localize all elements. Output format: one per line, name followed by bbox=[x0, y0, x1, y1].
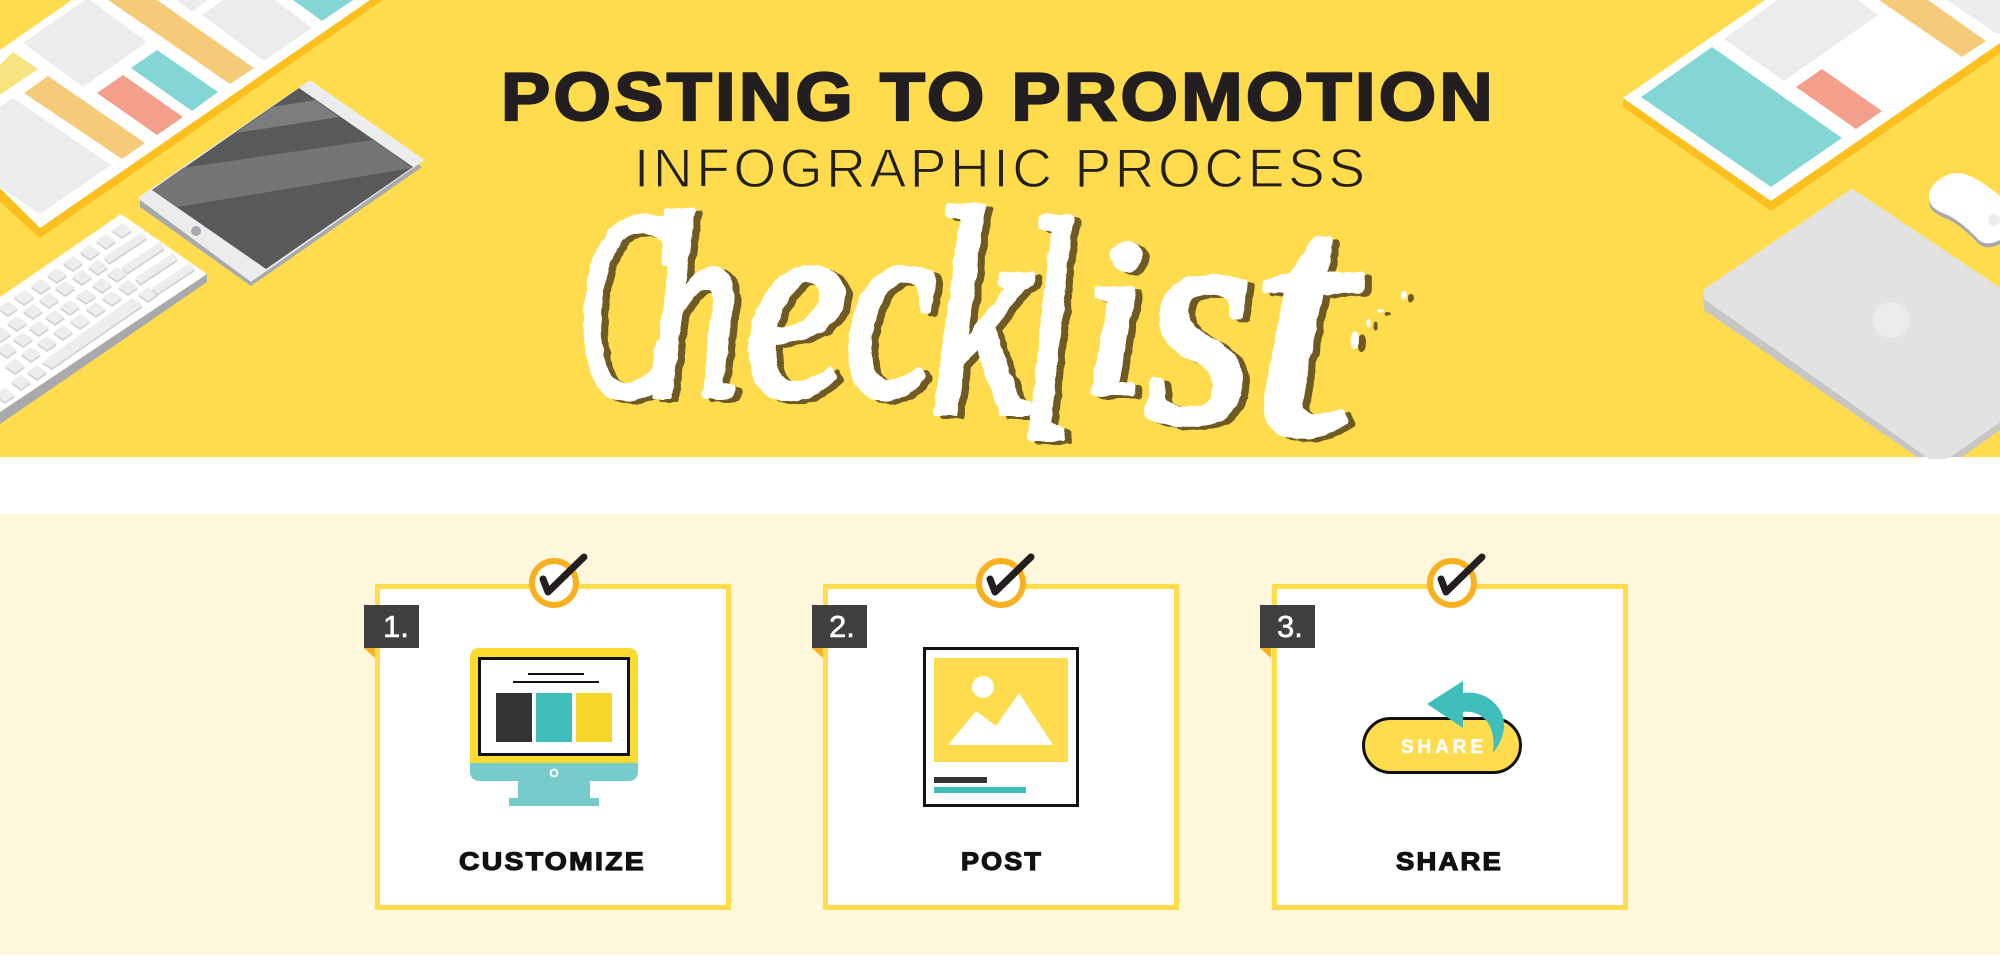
illustration: right paper layout sheet bbox=[1623, 0, 2000, 211]
script heading: Checklist bbox=[578, 129, 1407, 506]
label: share: SHARE bbox=[1396, 848, 1503, 876]
card 3: share bbox=[1260, 557, 1626, 908]
check ring 2 bbox=[979, 557, 1031, 605]
script heading: Checklist: C bbox=[578, 156, 673, 453]
script heading: Checklist: i bbox=[1083, 195, 1145, 441]
number badge 2 bbox=[812, 605, 867, 658]
icon: share button with arrow: SHARE bbox=[1401, 737, 1483, 758]
number badge 3 bbox=[1260, 605, 1315, 658]
illustration: left paper layout sheet bbox=[0, 0, 383, 238]
script heading: Checklist: c bbox=[845, 156, 935, 453]
script heading: Checklist: s bbox=[1145, 153, 1253, 485]
script heading: Checklist: h bbox=[648, 161, 740, 453]
number badge 1: 1. bbox=[383, 609, 409, 644]
subtitle: Infographic Process: INFOGRAPHIC PROCESS bbox=[634, 137, 1365, 199]
card 2: post bbox=[812, 557, 1176, 908]
illustration: keyboard bbox=[0, 214, 207, 424]
script heading: Checklist: k bbox=[930, 149, 1036, 477]
script heading: Checklist: l bbox=[1020, 157, 1075, 506]
panel: cream process section bbox=[0, 514, 2000, 955]
label: post: POST bbox=[961, 848, 1043, 876]
check ring 1 bbox=[532, 557, 584, 605]
card 1: customize bbox=[364, 557, 728, 908]
icon: desktop monitor bbox=[470, 648, 638, 806]
script heading: Checklist: e bbox=[745, 156, 847, 453]
label: customize: CUSTOMIZE bbox=[459, 848, 646, 876]
panel: yellow header banner bbox=[0, 0, 2000, 457]
icon: share button with arrow bbox=[1364, 681, 1520, 772]
icon: image post bbox=[924, 648, 1078, 806]
illustration: tablet bbox=[140, 82, 422, 286]
number badge 2: 2. bbox=[829, 609, 855, 644]
illustration: laptop bbox=[1703, 191, 2000, 457]
illustration: mouse bbox=[1929, 173, 2000, 247]
title: Posting to Promotion: POSTING TO PROMOTION bbox=[501, 59, 1496, 135]
check ring 3 bbox=[1430, 557, 1482, 605]
script heading: Checklist: t bbox=[1250, 129, 1367, 506]
number badge 1 bbox=[364, 605, 419, 658]
number badge 3: 3. bbox=[1277, 609, 1303, 644]
